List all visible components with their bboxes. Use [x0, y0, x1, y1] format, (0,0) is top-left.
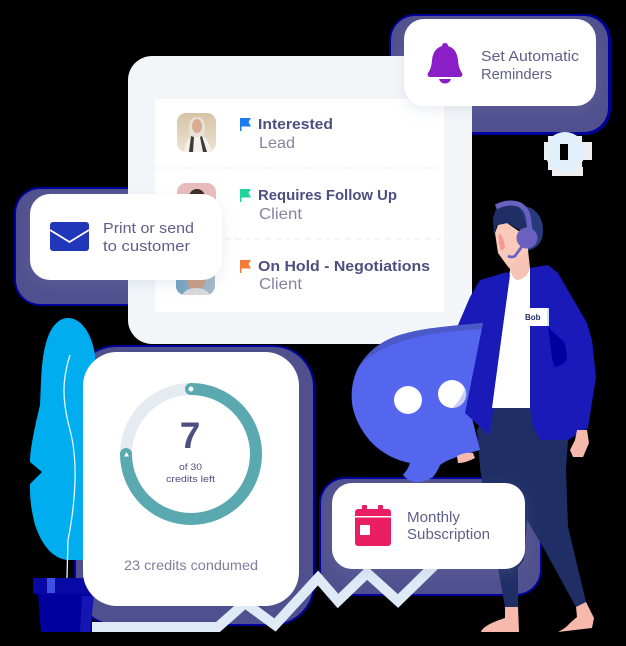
stem — [64, 355, 75, 578]
shirt — [492, 268, 531, 408]
pants — [477, 405, 586, 607]
text: monthly subscription — [407, 510, 490, 543]
row: on hold — [176, 256, 430, 295]
icon: blue flag — [240, 118, 251, 131]
text: print or send: Print or send — [103, 221, 194, 237]
pot — [33, 578, 94, 632]
label: client: Client — [259, 206, 303, 223]
text: set automatic reminders — [481, 49, 579, 83]
label: on hold: On Hold - Negotiations — [258, 258, 430, 275]
face — [495, 223, 528, 268]
text: print or send — [103, 221, 194, 255]
label: requires follow up: Requires Follow Up — [258, 187, 397, 204]
bubble dots — [394, 380, 466, 414]
panel: lead list — [128, 56, 472, 344]
neck — [505, 250, 530, 280]
icon: bell — [428, 43, 462, 84]
avatar: person on pink — [177, 183, 216, 222]
label: interested: Interested — [258, 116, 333, 133]
text: monthly subscription: Monthly — [407, 510, 461, 526]
donut chart — [124, 386, 256, 519]
feet — [481, 602, 594, 632]
panel: credits — [83, 352, 299, 606]
text: monthly subscription: Subscription — [407, 527, 490, 543]
number 7: 7 — [180, 415, 200, 456]
credits condumed: 23 credits condumed — [124, 558, 258, 573]
person with speech bubble — [352, 203, 596, 632]
credits left: credits left — [166, 474, 215, 485]
card: reminders — [404, 19, 596, 106]
list card — [155, 99, 444, 312]
text: print or send: to customer — [103, 239, 190, 255]
jacket inner shadow — [548, 327, 567, 367]
name tag: Bob — [525, 313, 541, 322]
text: set automatic reminders: Reminders — [481, 67, 552, 83]
jacket right — [530, 265, 596, 440]
icon: envelope — [50, 222, 89, 251]
back hair — [518, 207, 543, 251]
leaf — [30, 318, 100, 560]
card: print or send — [30, 194, 222, 280]
icon: calendar — [355, 505, 391, 546]
line chart — [88, 558, 442, 627]
card shadow: print or send — [14, 187, 214, 306]
card shadow: reminders — [389, 14, 611, 135]
label: client: Client — [259, 276, 303, 293]
avatar: woman in headscarf — [177, 113, 216, 152]
left hand — [457, 453, 475, 463]
text: set automatic reminders: Set Automatic — [481, 49, 579, 65]
jacket front left — [465, 272, 510, 436]
row: requires follow up — [177, 183, 397, 223]
decorative ring — [544, 132, 592, 176]
plant — [30, 318, 100, 632]
icon: orange flag — [240, 260, 251, 273]
icon: green flag — [240, 189, 251, 202]
fringe hair — [493, 204, 527, 235]
right hand — [570, 430, 589, 457]
card shadow: credits — [74, 345, 315, 626]
of 30: of 30 — [179, 462, 202, 473]
headset — [496, 203, 538, 257]
left jacket sleeve — [440, 272, 507, 420]
label: lead: Lead — [259, 135, 295, 152]
card: monthly subscription — [332, 483, 525, 569]
speech bubble — [352, 323, 483, 482]
card shadow: monthly subscription — [319, 477, 542, 596]
name tag — [523, 308, 549, 326]
row: interested lead — [177, 113, 333, 152]
avatar: man — [176, 256, 215, 295]
